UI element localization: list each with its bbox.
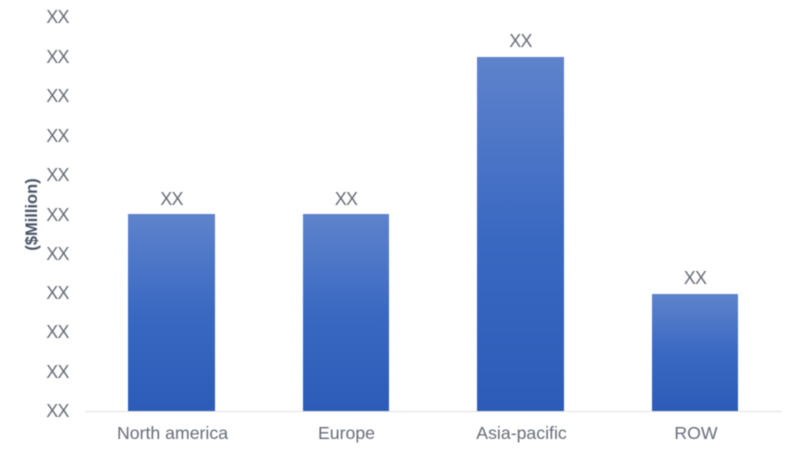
x axis line xyxy=(85,410,782,412)
y axis labels: XX xyxy=(46,47,69,67)
y axis labels: XX xyxy=(46,283,69,303)
bar: ROW xyxy=(652,268,738,443)
bar: Europe: XX xyxy=(335,189,358,209)
bar: North america: North america xyxy=(117,423,228,443)
y axis labels: XX xyxy=(46,205,69,225)
bar: North america: XX xyxy=(160,189,183,209)
bar: ROW: ROW xyxy=(674,423,718,443)
y axis labels: XX xyxy=(46,86,69,106)
y axis labels: XX xyxy=(46,362,69,382)
y axis labels xyxy=(46,7,69,421)
y axis labels: XX xyxy=(46,7,69,27)
y axis title: ($Million) xyxy=(23,178,41,251)
bar: Asia-pacific: Asia-pacific xyxy=(476,423,567,443)
bar: ROW: XX xyxy=(684,268,707,288)
y axis labels: XX xyxy=(46,244,69,264)
bar: Europe: Europe xyxy=(318,423,375,443)
bar: Asia-pacific: XX xyxy=(509,31,532,51)
y axis labels: XX xyxy=(46,165,69,185)
y axis labels: XX xyxy=(46,401,69,421)
y axis labels: XX xyxy=(46,126,69,146)
bar: Asia-pacific xyxy=(476,31,567,443)
y axis labels: XX xyxy=(46,322,69,342)
bar: Europe xyxy=(303,189,389,443)
bar: North america xyxy=(117,189,228,443)
